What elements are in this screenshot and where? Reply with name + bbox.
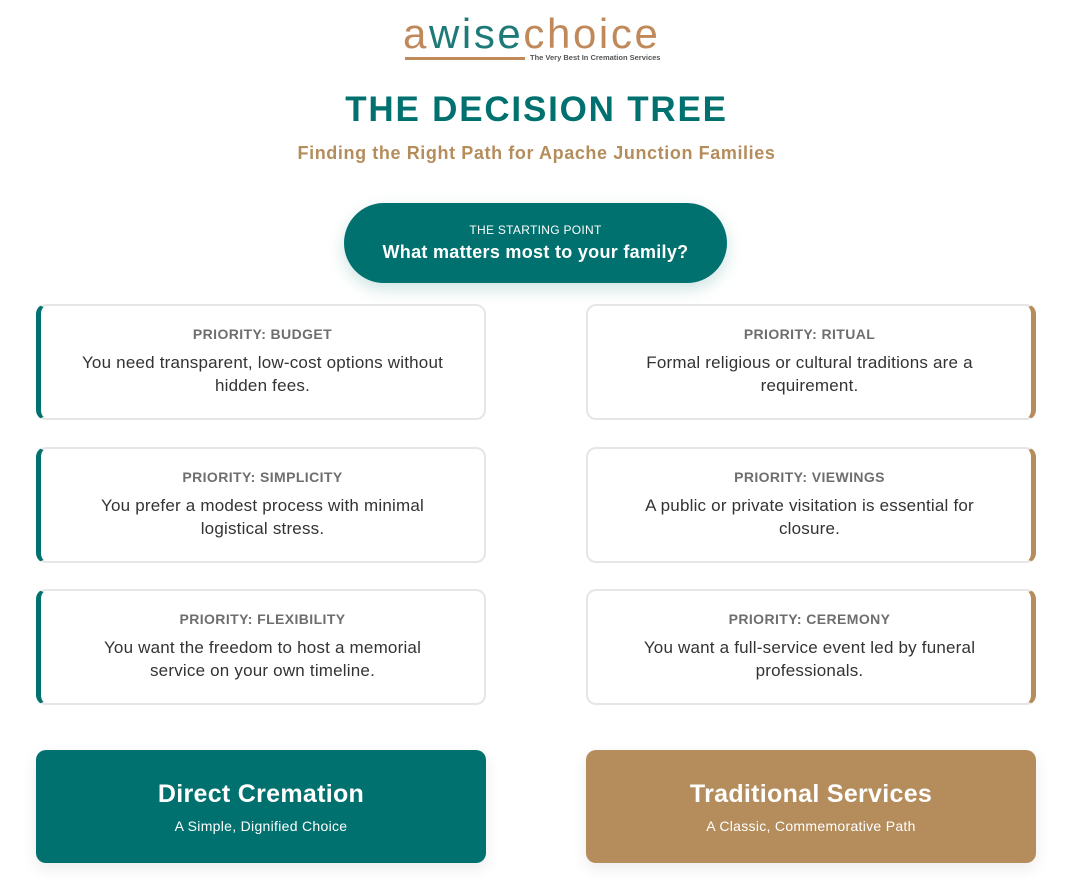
card: ritual: PRIORITY: RITUAL	[744, 326, 875, 342]
card: ceremony: You want a full-service event led by funeral professionals.	[644, 638, 975, 680]
card: ceremony	[586, 589, 1036, 705]
card: viewings: A public or private visitation is essential for closure.	[645, 496, 974, 538]
logo: awisechoice	[403, 10, 660, 57]
starting point pill: What matters most to your family?	[383, 242, 688, 262]
outcome: direct cremation: Direct Cremation	[158, 780, 364, 808]
subtitle: Finding the Right Path for Apache Junction Families	[298, 143, 775, 163]
title: THE DECISION TREE	[345, 90, 728, 129]
starting point pill	[344, 203, 727, 283]
card: flexibility: You want the freedom to host a memorial service on your own timeline.	[104, 638, 421, 680]
card: budget: PRIORITY: BUDGET	[193, 326, 332, 342]
card: viewings	[586, 447, 1036, 563]
card: ritual	[586, 304, 1036, 420]
card: simplicity	[36, 447, 486, 563]
outcome: direct cremation	[36, 750, 486, 863]
card: flexibility: PRIORITY: FLEXIBILITY	[179, 611, 346, 627]
card: ceremony: PRIORITY: CEREMONY	[729, 611, 890, 627]
card: flexibility	[36, 589, 486, 705]
outcome: traditional services	[586, 750, 1036, 863]
card: viewings: PRIORITY: VIEWINGS	[734, 469, 885, 485]
card: budget: You need transparent, low-cost options without hidden fees.	[82, 353, 443, 395]
card: simplicity: You prefer a modest process with minimal logistical stress.	[101, 496, 424, 538]
card: simplicity: PRIORITY: SIMPLICITY	[182, 469, 343, 485]
card: budget	[36, 304, 486, 420]
logo: The Very Best In Cremation Services	[530, 53, 660, 62]
card: ritual: Formal religious or cultural traditions are a requirement.	[646, 353, 973, 395]
starting point pill: THE STARTING POINT	[469, 223, 602, 237]
outcome: traditional services: Traditional Services	[690, 780, 932, 808]
outcome: direct cremation: A Simple, Dignified Choice	[175, 818, 347, 834]
outcome: traditional services: A Classic, Commemorative Path	[706, 818, 916, 834]
